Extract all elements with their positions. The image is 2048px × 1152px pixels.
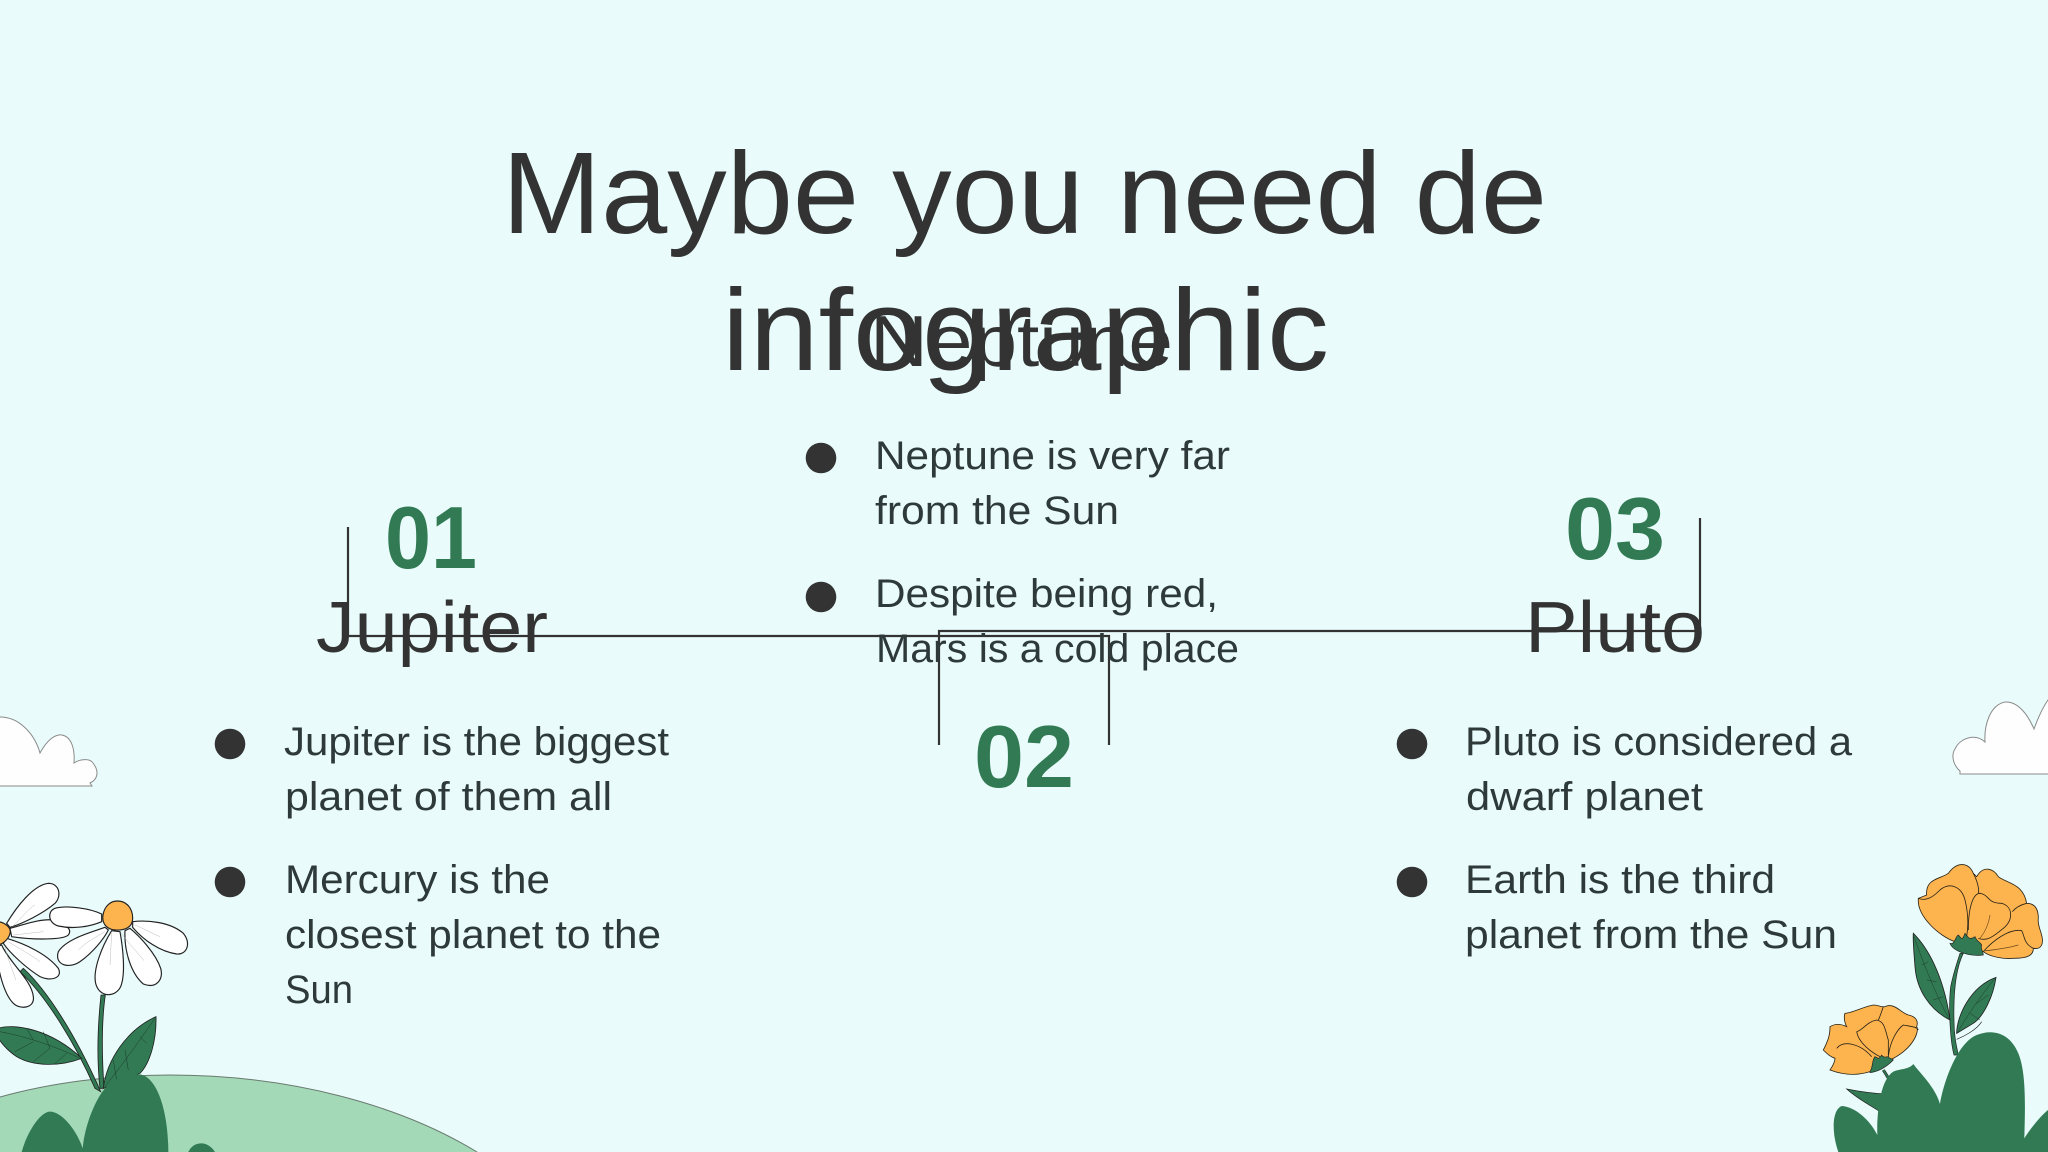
daisy: left, cropped	[0, 883, 70, 1007]
heading Neptune: Neptune	[870, 302, 1173, 382]
flower: small	[1823, 1005, 1918, 1083]
connector: bracket from 01 to 02	[348, 527, 1109, 745]
bullet list: from the Sun	[875, 489, 1119, 533]
column: Neptune	[806, 302, 1239, 806]
illustration: hill	[0, 1075, 482, 1152]
illustration: right cloud	[1953, 695, 2048, 774]
number 01: 01	[385, 488, 477, 587]
leaf: upper left	[1913, 933, 1950, 1020]
title	[502, 128, 1547, 395]
flower: large	[1918, 865, 2042, 959]
bullet list: planet of them all	[285, 775, 612, 819]
bullet list: Mercury is the	[285, 858, 550, 902]
heading Pluto: Pluto	[1525, 588, 1705, 668]
bushes	[22, 1074, 215, 1152]
column: Pluto	[1397, 479, 1853, 957]
bullet list: dwarf planet	[1466, 775, 1703, 819]
bullet list	[806, 434, 1239, 671]
bullet list: Despite being red,	[875, 572, 1218, 616]
bullet list: Mars is a cold place	[876, 627, 1239, 671]
leaf: left	[0, 1027, 82, 1064]
bullet list: Neptune is very far	[875, 434, 1230, 478]
bullet list: Earth is the third	[1465, 858, 1775, 902]
bullet list: Jupiter is the biggest	[284, 720, 669, 764]
title: infographic	[722, 265, 1329, 395]
title: Maybe you need de	[502, 128, 1547, 258]
stems	[20, 968, 105, 1092]
illustration: orange flowers and bushes, bottom right	[1823, 865, 2048, 1152]
stem: tall flower	[1950, 953, 1963, 1055]
illustration: daisies and bushes, bottom left	[0, 883, 215, 1152]
illustration: left cloud	[0, 717, 97, 786]
bullet list: planet from the Sun	[1465, 913, 1837, 957]
bushes	[1834, 1032, 2048, 1152]
number 02: 02	[974, 707, 1074, 806]
number 03: 03	[1565, 479, 1665, 578]
bullet list	[215, 720, 669, 1012]
column: Jupiter	[215, 488, 669, 1012]
leaf: upper right	[1957, 977, 1996, 1039]
daisy: right	[50, 901, 188, 995]
heading Jupiter: Jupiter	[316, 588, 548, 668]
bullet list: Sun	[285, 968, 353, 1012]
bullet list: Pluto is considered a	[1465, 720, 1853, 764]
bullet list	[1397, 720, 1853, 957]
leaf: right	[103, 1017, 156, 1088]
connector: bracket from 02 to 03	[939, 518, 1700, 745]
bullet list: closest planet to the	[285, 913, 661, 957]
leaf: lower	[1847, 1089, 1885, 1112]
